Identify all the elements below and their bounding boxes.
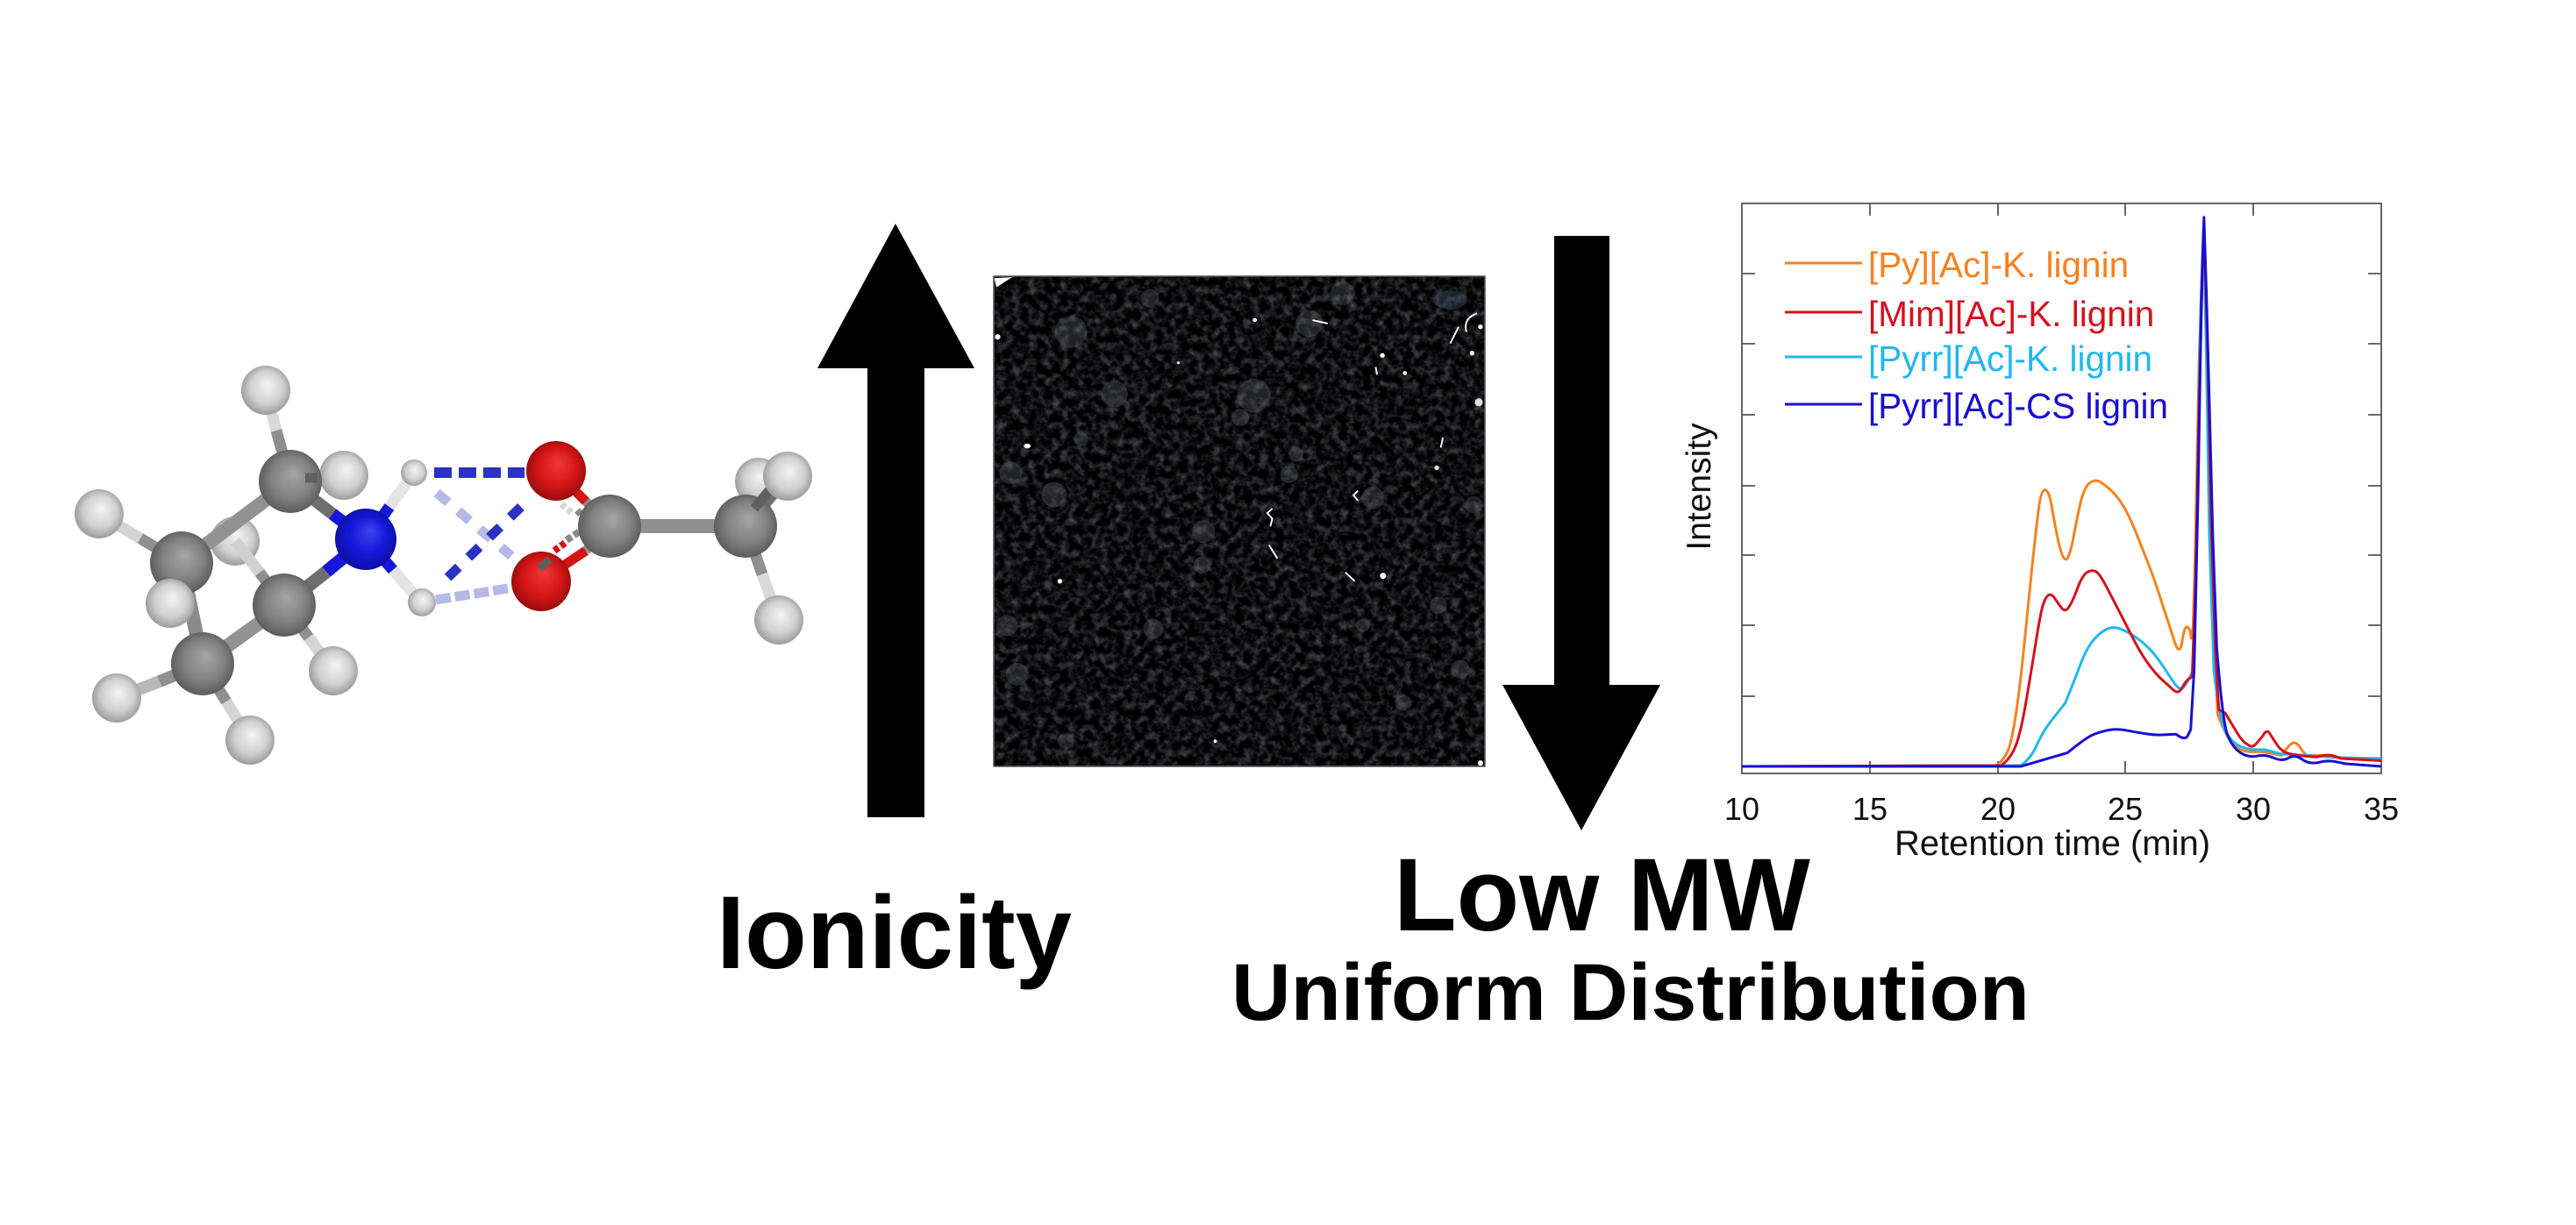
- GPC chromatogram chart: [1680, 203, 2399, 863]
- curve: [Pyrr][Ac]-CS lignin: [1742, 217, 2381, 766]
- atom: nitrogen: [335, 509, 396, 570]
- label: Ionicity: Ionicity: [717, 875, 1072, 991]
- x-axis tick labels: 20: [1980, 791, 2016, 827]
- back hydrogen atoms: [211, 451, 782, 566]
- covalent bonds: pyrrolidinium ring: [99, 390, 421, 740]
- chart legend: [Mim][Ac]-K. lignin: [1868, 294, 2154, 334]
- hydrogen bonds: dashed: [434, 473, 524, 600]
- chart legend: [1785, 245, 2168, 426]
- atoms: hydrogen: [75, 366, 812, 765]
- curve: [Pyrr][Ac]-K. lignin: [1742, 228, 2381, 766]
- plot frame and ticks: [1742, 203, 2381, 773]
- covalent bonds: acetate: [554, 476, 788, 620]
- x-axis tick labels: 10: [1724, 791, 1759, 827]
- chart curves: [1742, 217, 2381, 766]
- acetate bond stub over oxygen: [539, 559, 550, 568]
- x-axis tick labels: 25: [2108, 791, 2143, 827]
- x-axis tick labels: 30: [2236, 791, 2271, 827]
- chart legend: [Pyrr][Ac]-K. lignin: [1868, 338, 2152, 379]
- arrow: up, ionicity: [817, 224, 974, 817]
- label: Low MW: Low MW: [1394, 837, 1811, 953]
- x-axis tick labels: [1724, 791, 2399, 827]
- curve: [Py][Ac]-K. lignin: [1742, 237, 2381, 766]
- C-H stubs over carbon atoms: [305, 478, 770, 509]
- x-axis tick labels: 15: [1852, 791, 1887, 827]
- chart legend: [Pyrr][Ac]-CS lignin: [1868, 386, 2168, 426]
- curve: [Mim][Ac]-K. lignin: [1742, 239, 2381, 766]
- chart legend: [Py][Ac]-K. lignin: [1868, 245, 2129, 285]
- photo: dark lignin powder: [994, 276, 1485, 766]
- label: Uniform Distribution: Uniform Distribution: [1231, 948, 2030, 1037]
- molecular model: pyrrolidinium acetate ion pair: [75, 366, 812, 765]
- atoms: oxygen: [511, 441, 586, 611]
- photo frame: [994, 276, 1485, 766]
- x-axis tick labels: 35: [2364, 791, 2399, 827]
- bright specks: [995, 277, 1483, 766]
- powder base texture: [994, 276, 1485, 766]
- x-axis title: Retention time (min): [1895, 824, 2210, 863]
- arrow: down, low MW: [1502, 236, 1660, 830]
- atoms: carbon: [150, 450, 777, 695]
- y-axis title: Intensity: [1680, 423, 1718, 551]
- lighter grains: [996, 281, 1482, 750]
